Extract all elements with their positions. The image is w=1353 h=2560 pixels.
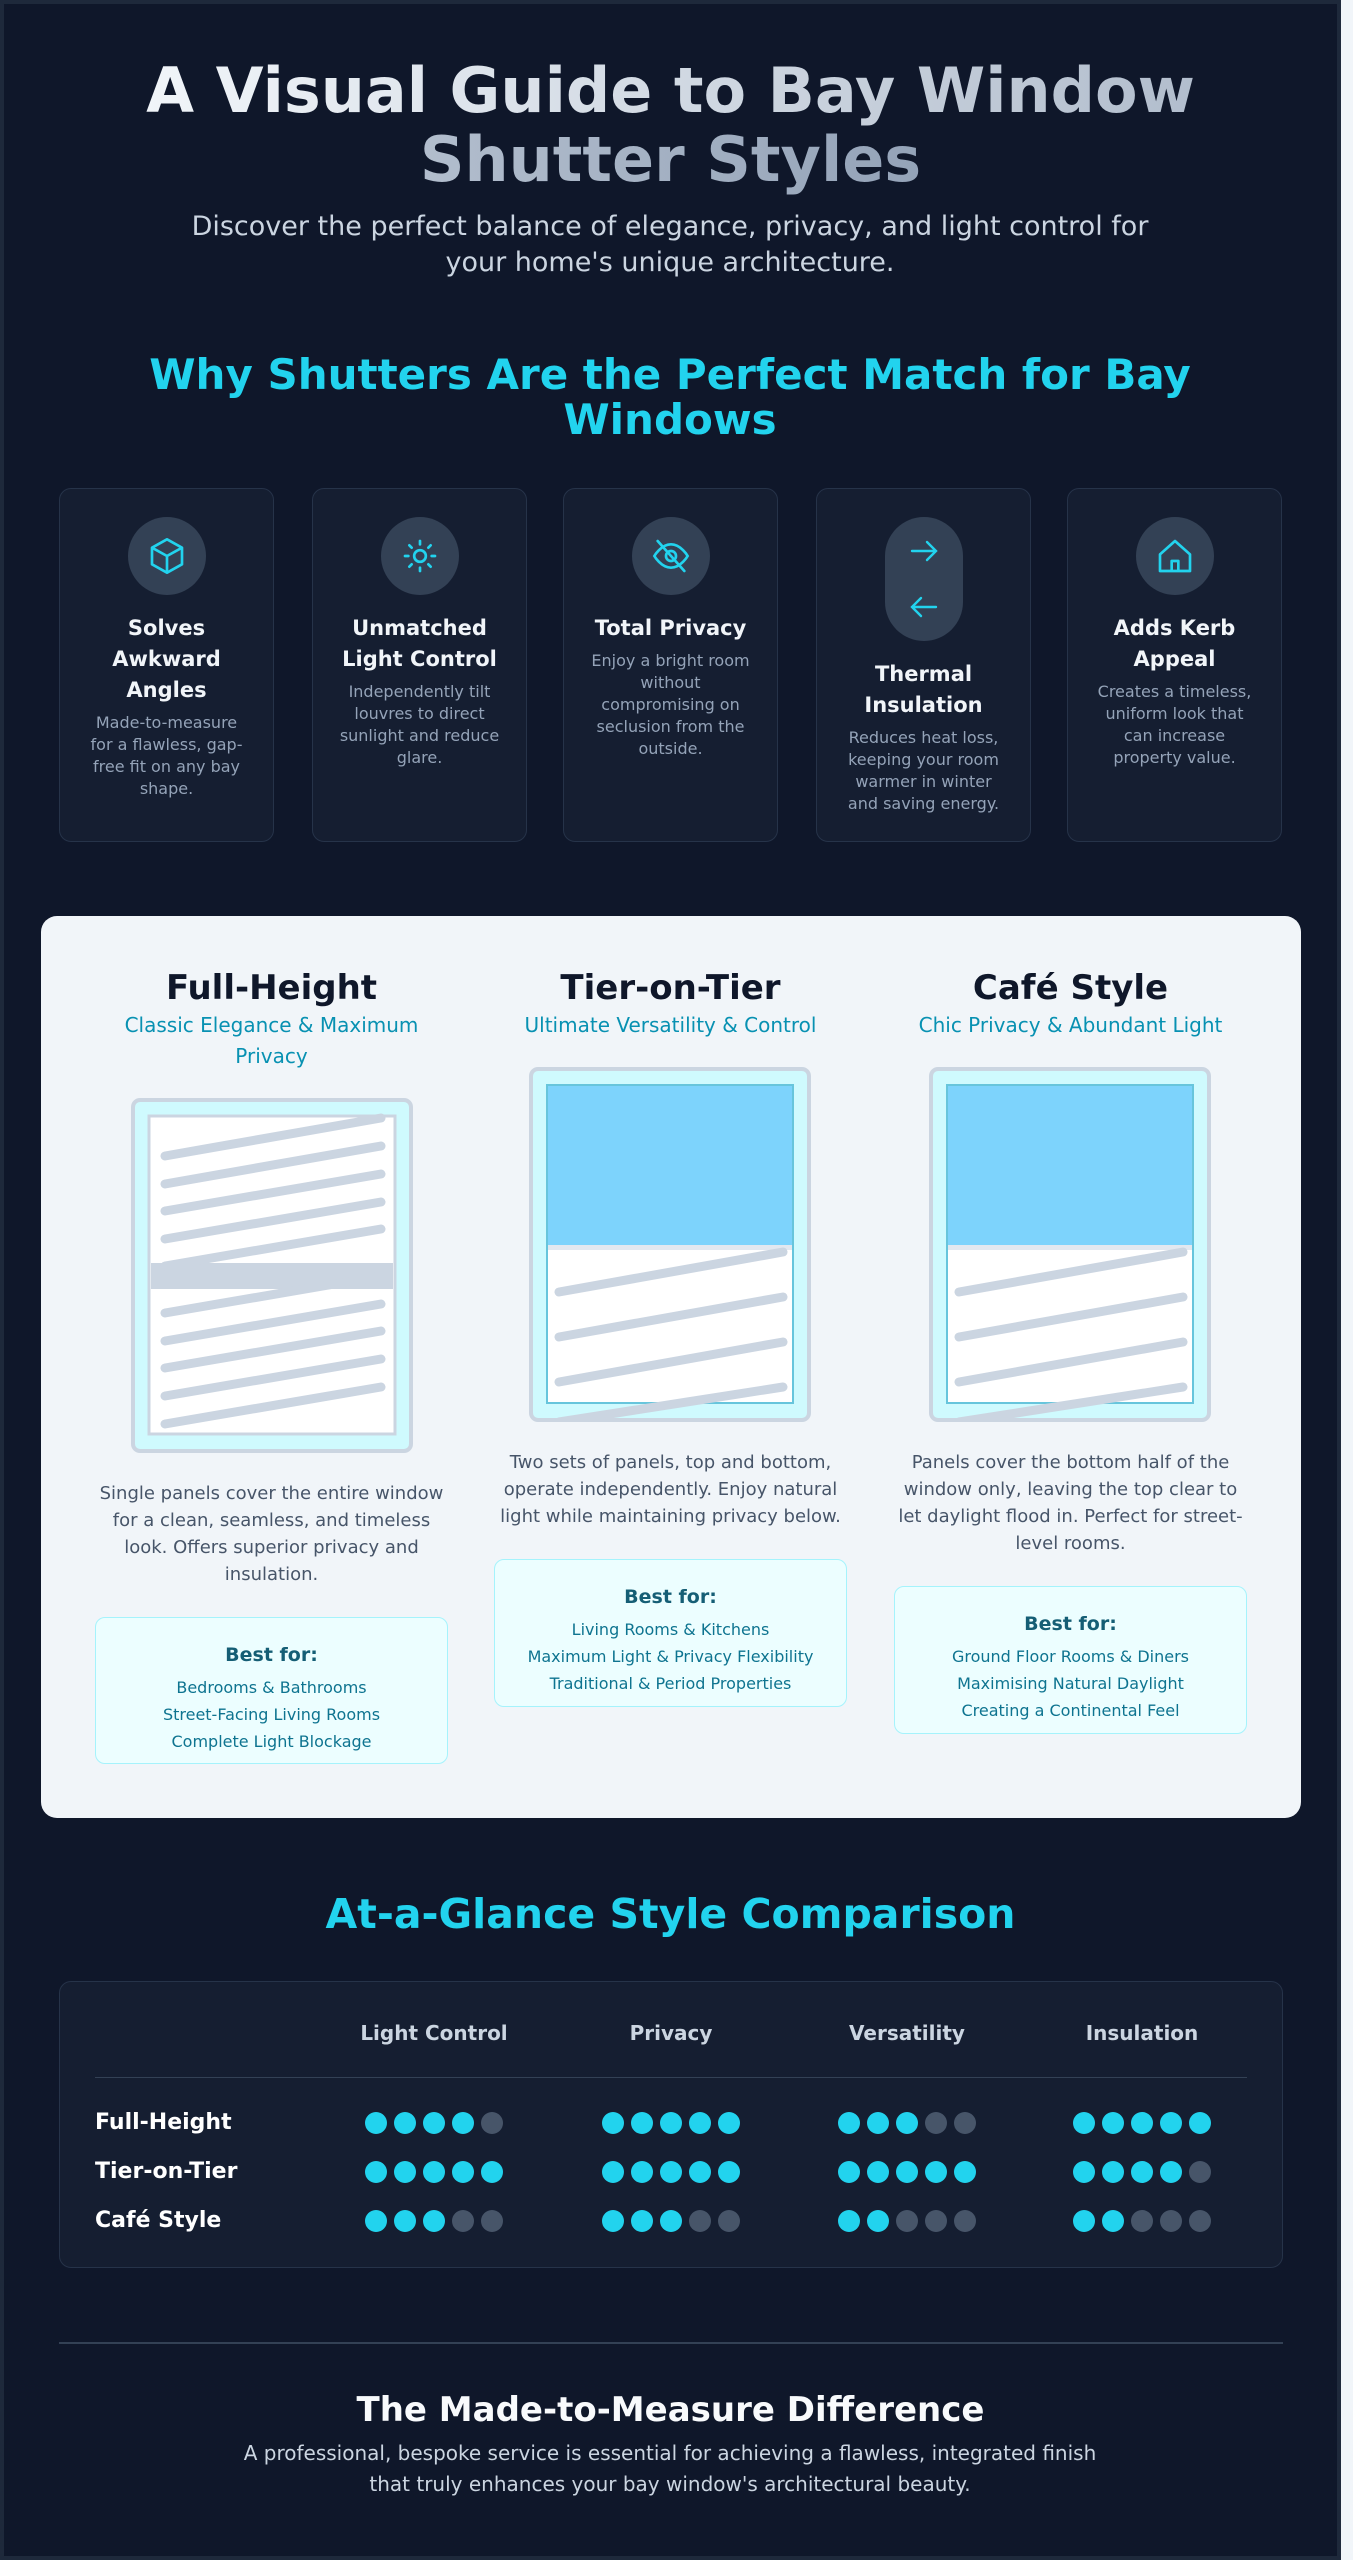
comparison table <box>59 1981 1283 2268</box>
column: full-height: Classic Elegance & Maximum Privacy <box>125 1013 418 1068</box>
icon: cube <box>128 517 206 595</box>
best for: full-height <box>95 1617 448 1764</box>
card: light control <box>312 488 527 842</box>
best for: tier <box>494 1559 847 1707</box>
title: A Visual Guide to Bay Window <box>146 54 1195 127</box>
card: solves awkward angles: Solves Awkward Angles <box>112 616 221 702</box>
card: light control: Independently tilt louvres to direct sunlight and reduce glare. <box>340 682 499 767</box>
row: tier-on-tier <box>95 2159 1211 2184</box>
footer heading: The Made-to-Measure Difference <box>356 2390 984 2430</box>
table headers: Insulation <box>1086 2021 1198 2045</box>
section heading: why shutters: Why Shutters Are the Perfect Match for Bay Windows <box>149 350 1191 444</box>
title <box>146 54 1195 196</box>
row: full-height <box>95 2110 1211 2135</box>
card: privacy <box>563 488 778 842</box>
section heading: comparison: At-a-Glance Style Comparison <box>326 1890 1016 1938</box>
best for: tier: Traditional & Period Properties <box>550 1674 791 1693</box>
description: cafe: Panels cover the bottom half of the window only, leaving the top clear to let daylight flood in. Perfect for street-level rooms. <box>898 1452 1243 1554</box>
table headers: Light Control <box>360 2021 508 2045</box>
card: privacy: Total Privacy <box>595 616 746 640</box>
table headers: Privacy <box>630 2021 712 2045</box>
best for: full-height: Bedrooms & Bathrooms <box>176 1678 367 1697</box>
illustration: cafe window <box>929 1067 1211 1422</box>
best for: full-height: Complete Light Blockage <box>171 1732 372 1751</box>
column: tier-on-tier <box>525 968 816 1037</box>
icon: house <box>1136 517 1214 595</box>
subtitle: Discover the perfect balance of elegance, privacy, and light control for your home's unique architecture. <box>192 211 1148 278</box>
card: kerb appeal <box>1067 488 1282 842</box>
row: tier-on-tier: Tier-on-Tier <box>95 2159 237 2184</box>
card: light control: Unmatched Light Control <box>342 616 497 671</box>
row: cafe style <box>95 2208 1211 2233</box>
column: cafe: Chic Privacy & Abundant Light <box>919 1013 1222 1037</box>
column: full-height: Full-Height <box>166 968 377 1008</box>
illustration: tier window <box>529 1067 811 1422</box>
column: full-height <box>125 968 418 1068</box>
description: tier: Two sets of panels, top and bottom, operate independently. Enjoy natural light while maintaining privacy below. <box>500 1452 841 1527</box>
description: full-height: Single panels cover the entire window for a clean, seamless, and timeless look. Offers superior privacy and insulation. <box>100 1483 443 1585</box>
card: solves awkward angles <box>59 488 274 842</box>
card: thermal insulation <box>816 488 1031 842</box>
icon: sun <box>380 517 458 595</box>
column: cafe: Café Style <box>973 968 1168 1008</box>
panel: shutter styles <box>41 916 1301 1818</box>
best for: tier: Maximum Light & Privacy Flexibility <box>528 1647 813 1666</box>
best for: full-height: Best for: <box>225 1644 318 1666</box>
best for: full-height: Street-Facing Living Rooms <box>163 1705 380 1724</box>
card: thermal insulation: Thermal Insulation <box>864 662 983 717</box>
best for: tier: Living Rooms & Kitchens <box>572 1620 769 1639</box>
card: privacy: Enjoy a bright room without compromising on seclusion from the outside. <box>591 651 750 758</box>
illustration: full-height window <box>131 1098 413 1453</box>
best for: cafe: Best for: <box>1024 1613 1117 1635</box>
card: kerb appeal: Creates a timeless, uniform look that can increase property value. <box>1098 682 1251 767</box>
best for: cafe: Ground Floor Rooms & Diners <box>952 1647 1189 1666</box>
icon: eye off <box>632 517 710 595</box>
card: solves awkward angles: Made-to-measure for a flawless, gap-free fit on any bay shape. <box>91 713 242 798</box>
column: tier-on-tier: Tier-on-Tier <box>560 968 781 1008</box>
best for: tier: Best for: <box>624 1586 717 1608</box>
row: cafe style: Café Style <box>95 2208 221 2233</box>
card: kerb appeal: Adds Kerb Appeal <box>1114 616 1235 671</box>
best for: cafe <box>894 1586 1247 1734</box>
column: cafe <box>919 968 1222 1037</box>
footer text: A professional, bespoke service is essential for achieving a flawless, integrated finish that truly enhances your bay window's architectural beauty. <box>244 2441 1096 2496</box>
row: full-height: Full-Height <box>95 2110 232 2135</box>
title: Shutter Styles <box>420 123 921 196</box>
best for: cafe: Creating a Continental Feel <box>961 1701 1180 1720</box>
icon: arrows <box>884 517 962 641</box>
table headers: Versatility <box>849 2021 965 2045</box>
column: tier-on-tier: Ultimate Versatility & Control <box>525 1013 816 1037</box>
best for: cafe: Maximising Natural Daylight <box>957 1674 1184 1693</box>
card: thermal insulation: Reduces heat loss, keeping your room warmer in winter and saving energy. <box>848 728 999 813</box>
